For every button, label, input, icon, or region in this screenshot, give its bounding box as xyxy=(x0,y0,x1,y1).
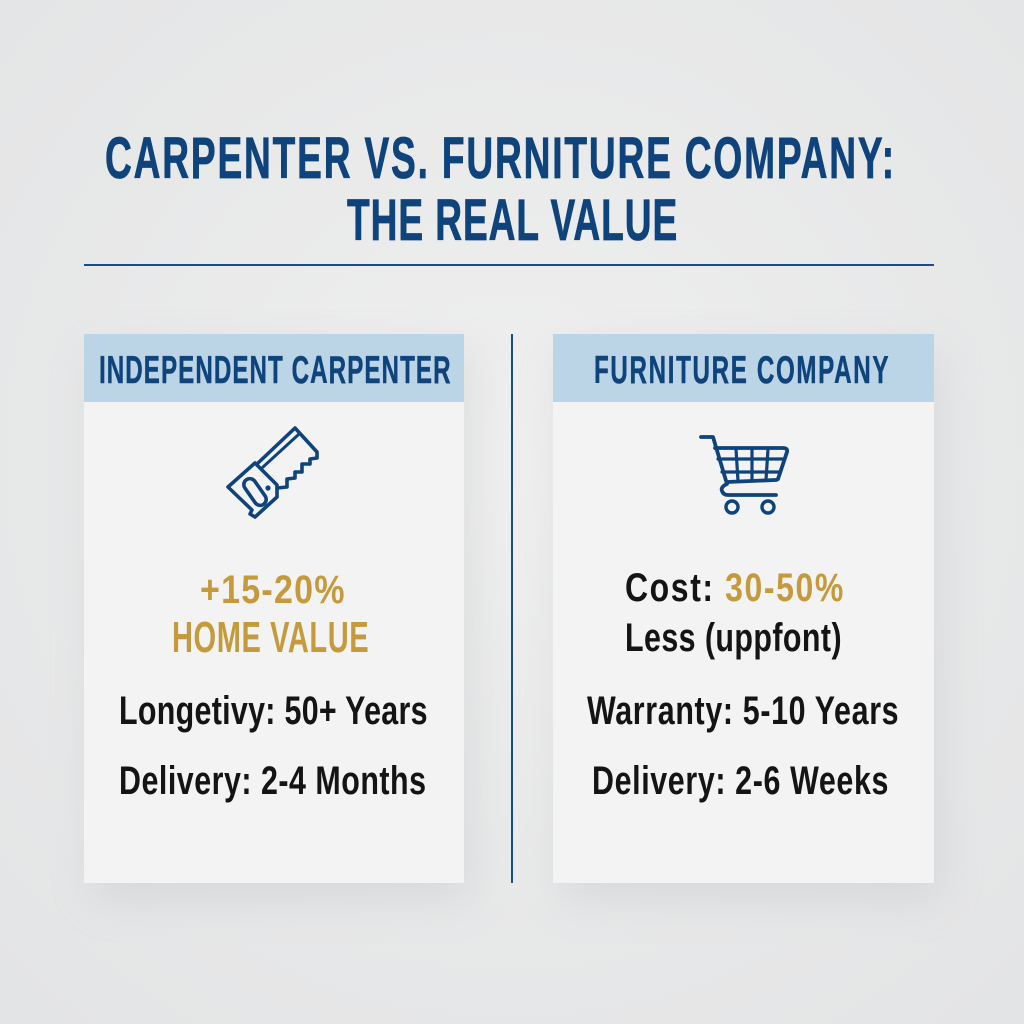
icon: shopping cart xyxy=(701,437,787,513)
panel header: independent carpenter: INDEPENDENT CARPENTER xyxy=(99,348,451,391)
center divider xyxy=(511,334,513,883)
stat: cost: Less (uppfont) xyxy=(625,615,842,660)
panel: independent carpenter xyxy=(84,334,472,901)
stat: warranty: Warranty: 5-10 Years xyxy=(587,688,899,733)
title: CARPENTER VS. FURNITURE COMPANY: xyxy=(105,127,894,191)
title: THE REAL VALUE xyxy=(347,189,677,253)
panel: furniture company xyxy=(553,334,942,901)
icon: hand saw xyxy=(228,428,317,517)
stat: home value: HOME VALUE xyxy=(172,612,369,661)
stat: delivery: Delivery: 2-4 Months xyxy=(119,758,426,803)
stat: longevity: Longetivy: 50+ Years xyxy=(119,688,428,733)
stat: cost xyxy=(625,565,843,660)
title xyxy=(105,127,894,253)
panel header: independent carpenter xyxy=(84,334,464,402)
stat: home value xyxy=(172,566,369,661)
stat: cost: Cost: 30-50% xyxy=(625,565,843,610)
panel header: furniture company: FURNITURE COMPANY xyxy=(594,348,889,391)
stat: home value: +15-20% xyxy=(200,566,345,612)
panel header: furniture company xyxy=(553,334,934,402)
stat: delivery: Delivery: 2-6 Weeks xyxy=(592,758,888,803)
